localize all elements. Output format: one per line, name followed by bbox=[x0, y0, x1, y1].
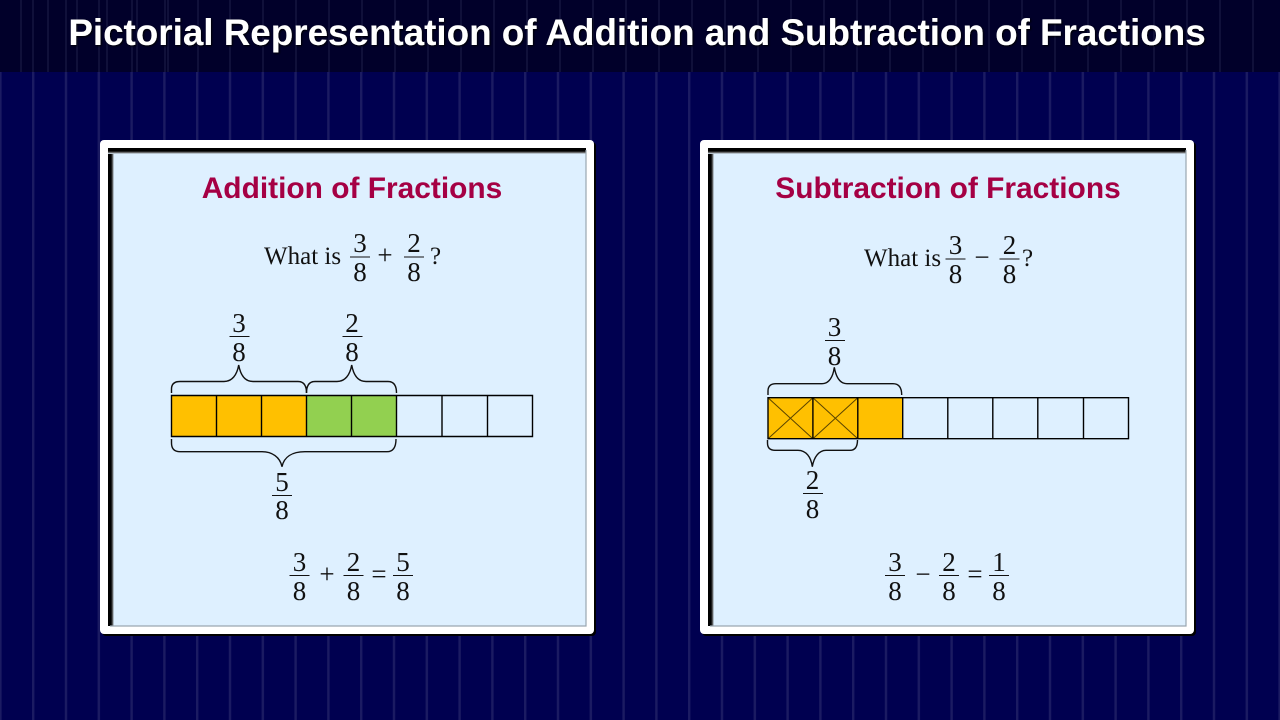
equation: 8 bbox=[888, 576, 902, 606]
question: 2 bbox=[1003, 230, 1016, 260]
question: 8 bbox=[949, 259, 962, 289]
heading: Subtraction of Fractions bbox=[775, 172, 1121, 205]
question bbox=[264, 228, 441, 287]
equation: 8 bbox=[293, 576, 306, 606]
question: 8 bbox=[407, 257, 421, 287]
label: three eighths bbox=[825, 312, 845, 371]
question: ? bbox=[430, 243, 441, 270]
equation: = bbox=[967, 559, 983, 589]
title: Pictorial Representation of Addition and Subtraction of Fractions bbox=[68, 12, 1206, 53]
label: five eighths: 8 bbox=[275, 495, 289, 525]
panel: subtraction of fractions bbox=[700, 140, 1196, 636]
label: three eighths bbox=[230, 308, 250, 367]
equation: 2 bbox=[942, 547, 956, 577]
question: 3 bbox=[949, 230, 962, 260]
equation: 5 bbox=[396, 547, 410, 577]
equation: = bbox=[371, 559, 387, 589]
question bbox=[864, 230, 1033, 289]
equation: 3 bbox=[293, 547, 306, 577]
question: What is bbox=[864, 245, 941, 272]
brace: two eighths bbox=[768, 440, 858, 467]
brace: two eighths bbox=[306, 365, 396, 393]
question: ? bbox=[1022, 245, 1033, 272]
crossed-out cells bbox=[768, 398, 858, 439]
question: 3 bbox=[353, 228, 367, 258]
equation bbox=[885, 547, 1009, 606]
label: five eighths: 5 bbox=[275, 467, 289, 497]
label: two eighths: 2 bbox=[345, 308, 359, 338]
question: What is bbox=[264, 243, 341, 270]
heading: Addition of Fractions bbox=[202, 172, 502, 205]
fraction bar bbox=[768, 398, 1128, 439]
brace: three eighths bbox=[172, 365, 306, 393]
header band bbox=[0, 0, 1280, 72]
label: two eighths bbox=[342, 308, 362, 367]
label: three eighths: 8 bbox=[828, 341, 841, 371]
label: two eighths: 8 bbox=[345, 337, 359, 367]
label: two eighths bbox=[803, 465, 823, 524]
equation bbox=[290, 547, 413, 606]
equation: + bbox=[319, 559, 335, 589]
fraction bar bbox=[172, 396, 532, 436]
panel frame bbox=[700, 140, 1196, 636]
label: three eighths: 3 bbox=[232, 308, 246, 338]
equation: 8 bbox=[347, 576, 360, 606]
question: 8 bbox=[353, 257, 367, 287]
label: three eighths: 8 bbox=[232, 337, 246, 367]
question: 8 bbox=[1003, 259, 1016, 289]
label: three eighths: 3 bbox=[828, 312, 841, 342]
brace: five eighths bbox=[172, 439, 396, 467]
equation: − bbox=[915, 559, 931, 589]
panel: addition of fractions bbox=[100, 140, 596, 636]
equation: 8 bbox=[942, 576, 956, 606]
panel frame bbox=[100, 140, 596, 636]
question: − bbox=[974, 242, 990, 272]
equation: 3 bbox=[888, 547, 902, 577]
equation: 2 bbox=[347, 547, 360, 577]
equation: 8 bbox=[396, 576, 410, 606]
question: + bbox=[377, 240, 393, 270]
equation: 8 bbox=[992, 576, 1006, 606]
brace: three eighths bbox=[768, 367, 902, 395]
label: two eighths: 8 bbox=[806, 494, 819, 524]
label: two eighths: 2 bbox=[806, 465, 819, 495]
question: 2 bbox=[407, 228, 421, 258]
label: five eighths bbox=[272, 467, 292, 525]
equation: 1 bbox=[992, 547, 1006, 577]
